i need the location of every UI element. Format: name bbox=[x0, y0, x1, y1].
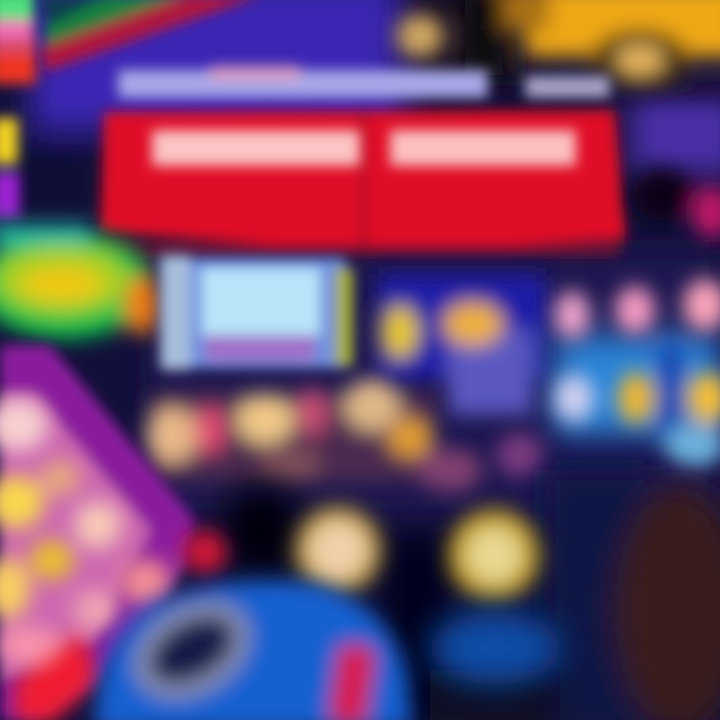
blue panel lower right bbox=[429, 612, 561, 684]
blue foreground cabinet bbox=[95, 580, 412, 720]
round glowing lights bbox=[294, 506, 540, 601]
right row of machines bbox=[555, 335, 720, 435]
banner lettering bbox=[152, 130, 576, 166]
blue game cabinet bbox=[378, 275, 546, 415]
light strip above banner bbox=[118, 66, 610, 98]
rainbow stripe top left bbox=[0, 0, 36, 218]
central bright screen bbox=[160, 255, 353, 370]
right dark mass bbox=[632, 169, 720, 238]
right round light bbox=[448, 509, 540, 601]
middle game lights bbox=[146, 379, 544, 492]
background: upper scene bbox=[0, 0, 720, 520]
left round light bbox=[294, 506, 382, 594]
slot machine symbols bbox=[0, 399, 227, 720]
machine lights bbox=[554, 279, 720, 467]
red banner bbox=[100, 110, 626, 255]
neon diagonal band bbox=[40, 0, 262, 72]
top right gold ceiling bbox=[396, 0, 720, 92]
foreground dark silhouettes bbox=[220, 470, 720, 720]
left green arcade dome bbox=[0, 225, 159, 339]
left pink slot machine bbox=[0, 345, 195, 720]
